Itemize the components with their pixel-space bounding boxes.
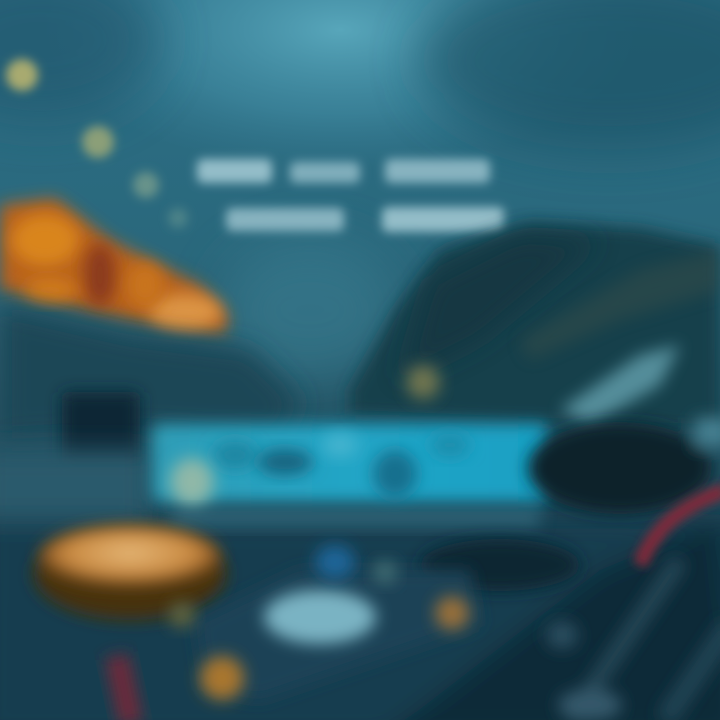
lower dark ground: [0, 450, 720, 720]
red curve: [640, 490, 720, 565]
cyan water band: [152, 424, 548, 528]
dark blob right: [420, 418, 720, 591]
orange bowl: [34, 526, 226, 620]
mountain: [350, 222, 720, 430]
icon: floating yellow lights: [6, 59, 188, 228]
title text: illegible blurred lines: [197, 159, 504, 232]
red post: [105, 653, 143, 720]
building below roof: [0, 305, 300, 464]
dark lines lower right: [546, 560, 720, 720]
device panel with light display: [169, 545, 480, 700]
orange roof: [0, 198, 228, 335]
